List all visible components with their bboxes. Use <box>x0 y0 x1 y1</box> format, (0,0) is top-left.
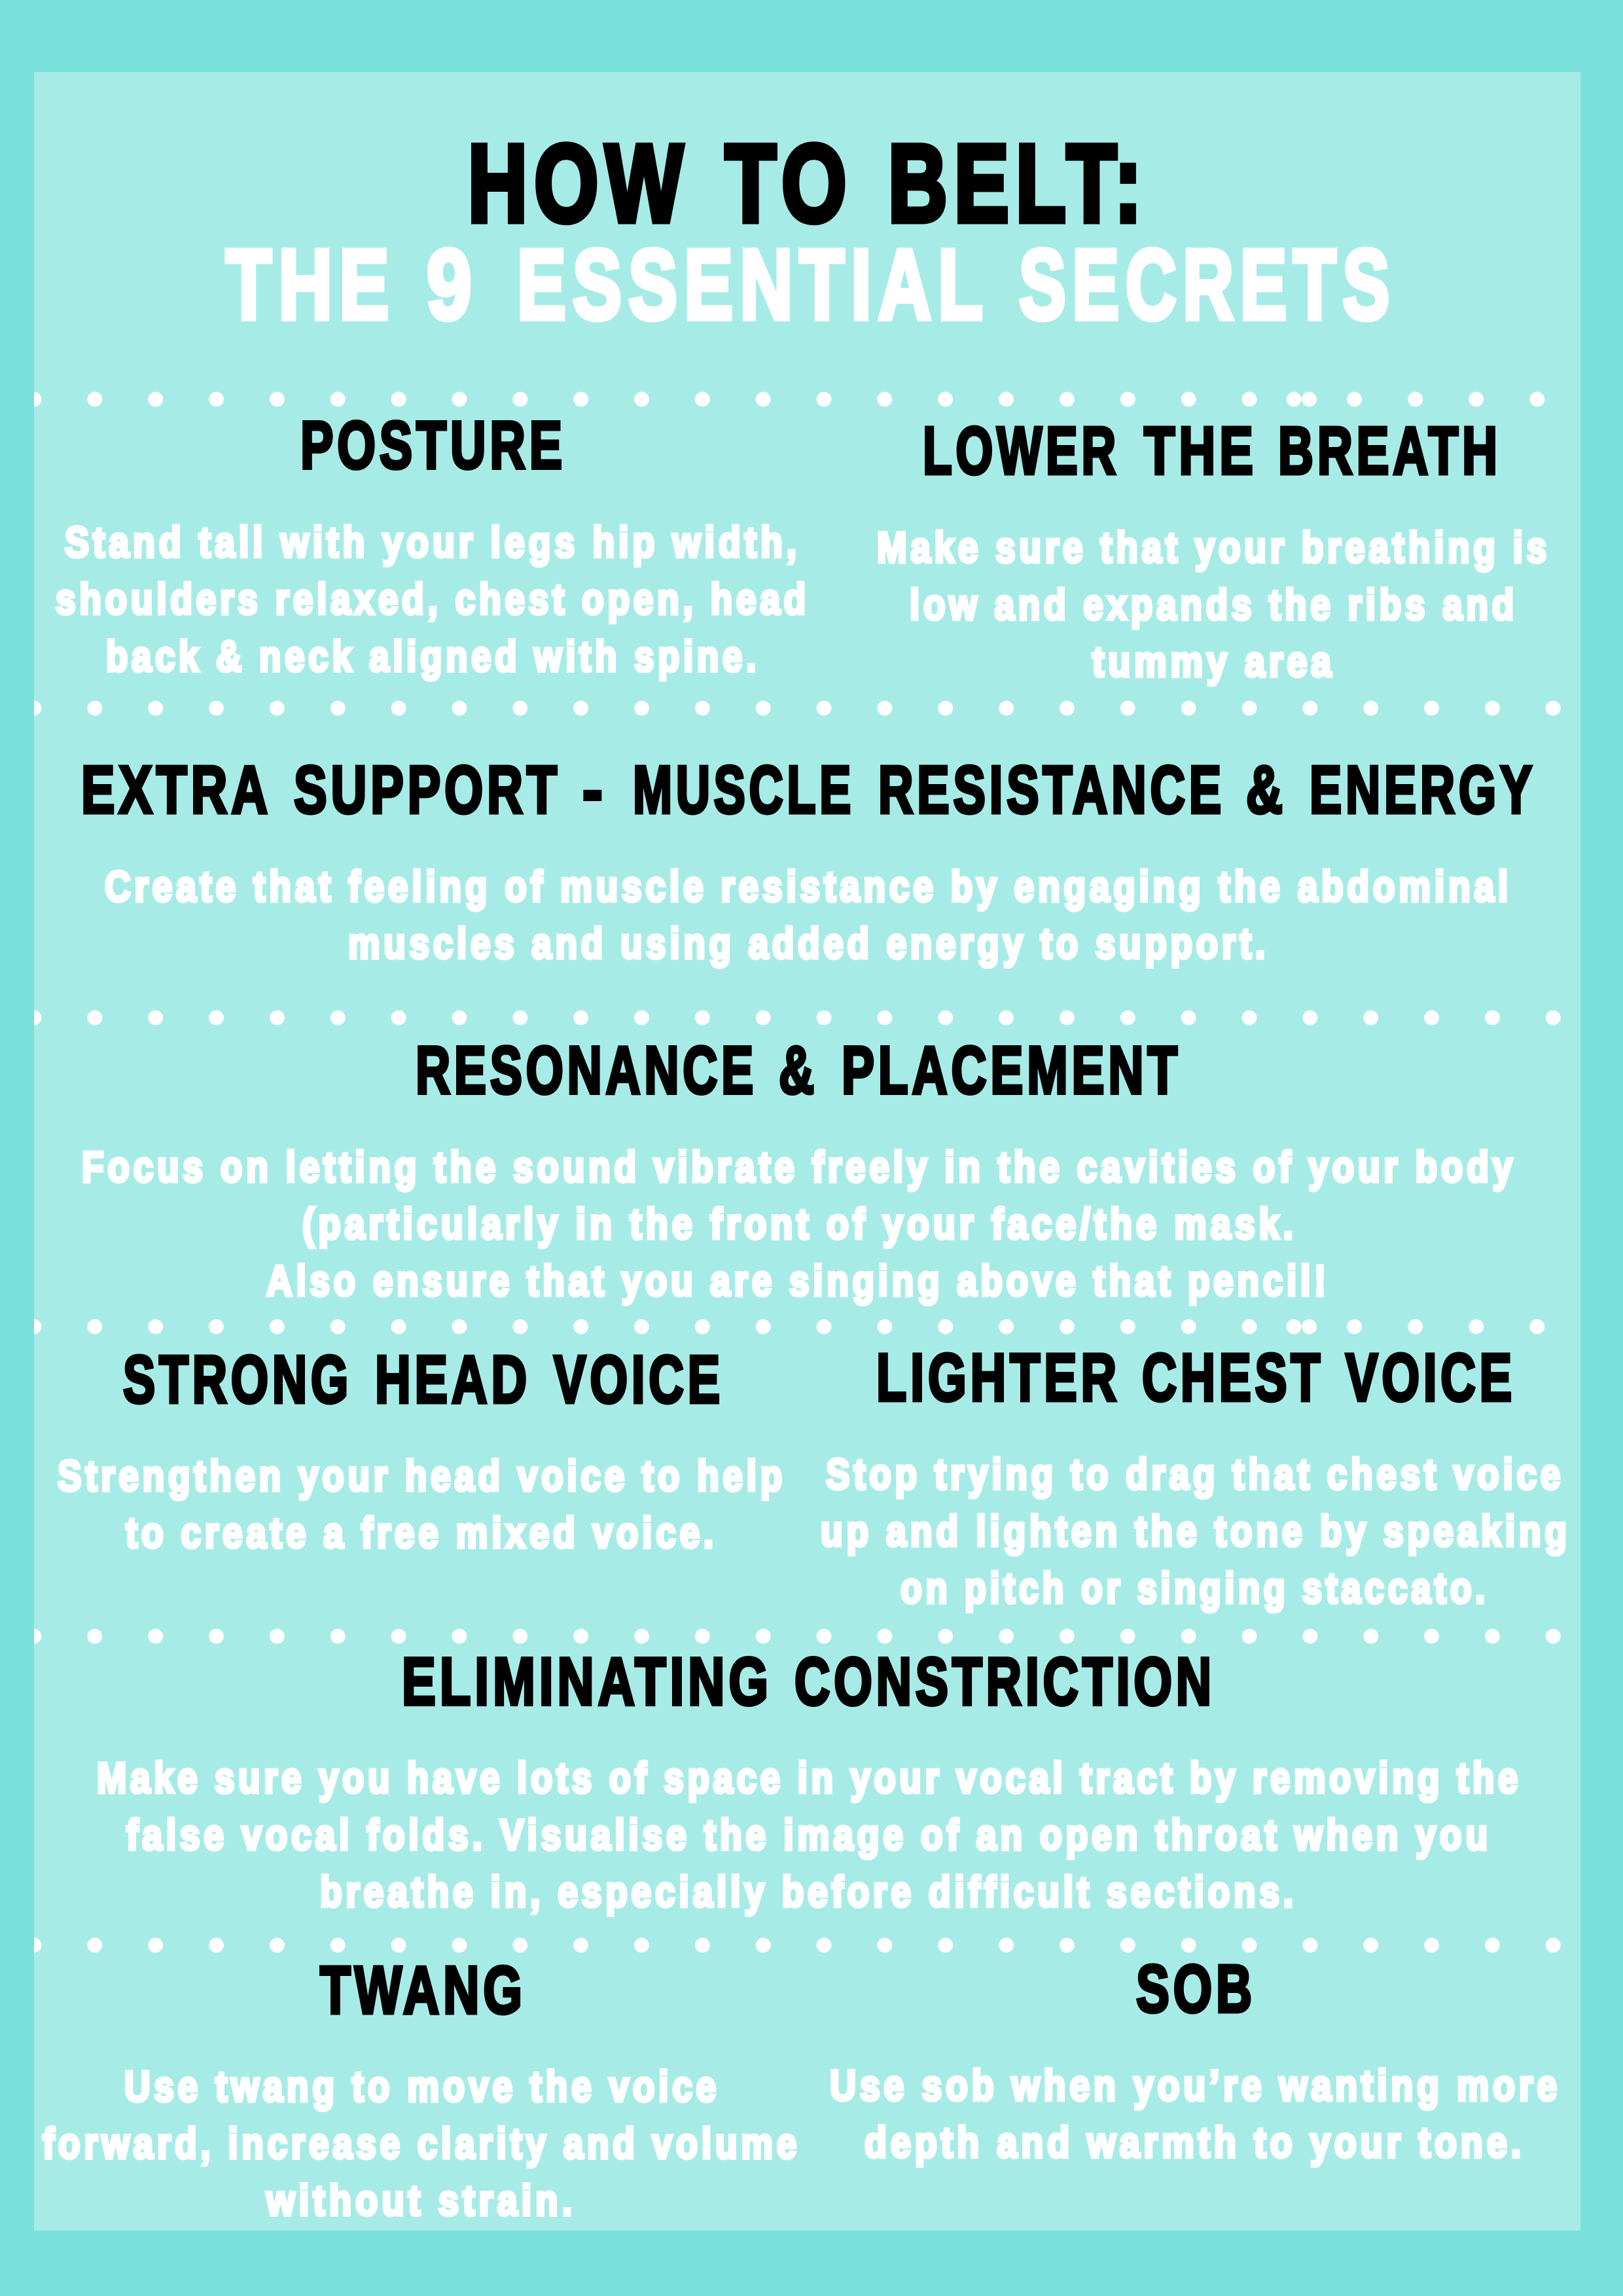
panel: lighter chest voice <box>821 1340 1571 1612</box>
text: twang body: Use twang to move the voice <box>124 2062 720 2110</box>
text: strong head voice body: to create a free mixed voice. <box>126 1508 717 1556</box>
text: extra support body: muscles and using added energy to support. <box>348 919 1269 967</box>
title <box>226 122 1396 340</box>
heading: strong head voice <box>123 1342 724 1417</box>
heading: lower the breath: LOWER <box>923 413 1120 488</box>
title: ESSENTIAL <box>517 229 990 340</box>
title: THE <box>226 229 396 340</box>
title: SECRETS <box>1019 229 1396 340</box>
text: resonance body: (particularly in the front of your face/the mask. <box>302 1199 1297 1247</box>
heading: strong head voice: VOICE <box>554 1342 724 1417</box>
heading: lower the breath: BREATH <box>1278 413 1501 488</box>
heading: strong head voice: HEAD <box>375 1342 531 1417</box>
heading: extra support <box>81 752 1536 827</box>
title: BELT: <box>888 122 1149 245</box>
heading: extra support: EXTRA <box>81 752 272 827</box>
heading: eliminating constriction <box>402 1644 1215 1719</box>
heading: sob: SOB <box>1136 1951 1256 2026</box>
heading: eliminating constriction: ELIMINATING <box>402 1644 772 1719</box>
heading: eliminating constriction: CONSTRICTION <box>794 1644 1215 1719</box>
text: lighter chest voice body: on pitch or singing staccato. <box>901 1564 1489 1612</box>
heading: extra support: & <box>1246 752 1287 827</box>
heading: extra support: SUPPORT <box>294 752 561 827</box>
text: eliminating constriction body <box>97 1753 1522 1916</box>
text: lower the breath body <box>877 523 1550 686</box>
text: resonance body <box>82 1143 1516 1305</box>
heading: lighter chest voice: CHEST <box>1142 1340 1324 1415</box>
text: sob body <box>830 2061 1561 2166</box>
panel: twang <box>43 1952 800 2224</box>
heading: lower the breath <box>923 413 1501 488</box>
panel: posture <box>56 407 810 681</box>
text: resonance body: Also ensure that you are singing above that pencil! <box>266 1257 1330 1305</box>
text: twang body: forward, increase clarity and volume <box>43 2119 800 2168</box>
heading: resonance and placement <box>416 1033 1181 1107</box>
panel: strong head voice <box>58 1342 786 1556</box>
panel: eliminating constriction <box>97 1644 1522 1916</box>
heading: resonance and placement: RESONANCE <box>416 1033 757 1107</box>
heading: lighter chest voice <box>876 1340 1516 1415</box>
panel: lower the breath <box>877 413 1550 686</box>
text: lighter chest voice body <box>821 1450 1571 1612</box>
heading: extra support: MUSCLE <box>633 752 855 827</box>
text: lower the breath body: low and expands the ribs and <box>910 580 1518 628</box>
text: extra support body <box>105 862 1512 967</box>
heading: extra support: RESISTANCE <box>878 752 1225 827</box>
text: posture body <box>56 518 810 681</box>
heading: twang: TWANG <box>320 1952 526 2028</box>
text: posture body: shoulders relaxed, chest open, head <box>56 575 810 623</box>
heading: lighter chest voice: VOICE <box>1346 1340 1516 1415</box>
text: lower the breath body: tummy area <box>1092 637 1335 686</box>
heading: lower the breath: THE <box>1144 413 1257 488</box>
text: twang body <box>43 2062 800 2224</box>
title: TO <box>725 122 853 245</box>
text: eliminating constriction body: breathe in, especially before difficult sections. <box>320 1867 1297 1916</box>
panel: extra support <box>81 752 1536 967</box>
heading: strong head voice: STRONG <box>123 1342 352 1417</box>
text: twang body: without strain. <box>266 2176 576 2224</box>
heading: posture: POSTURE <box>300 407 566 483</box>
heading: resonance and placement: & <box>779 1033 818 1107</box>
panel: resonance and placement <box>82 1033 1516 1305</box>
heading: extra support: ENERGY <box>1310 752 1536 827</box>
title: 9 <box>427 229 479 340</box>
text: strong head voice body <box>58 1452 786 1556</box>
panel: sob <box>830 1951 1561 2166</box>
heading: resonance and placement: PLACEMENT <box>842 1033 1181 1107</box>
heading: lighter chest voice: LIGHTER <box>876 1340 1120 1415</box>
text: strong head voice body: Strengthen your head voice to help <box>58 1452 786 1500</box>
dotted dividers <box>27 392 1561 1952</box>
text: posture body: Stand tall with your legs hip width, <box>65 518 800 566</box>
text: posture body: back & neck aligned with spine. <box>106 632 760 681</box>
title: HOW <box>468 122 690 245</box>
heading: extra support: - <box>582 752 607 827</box>
